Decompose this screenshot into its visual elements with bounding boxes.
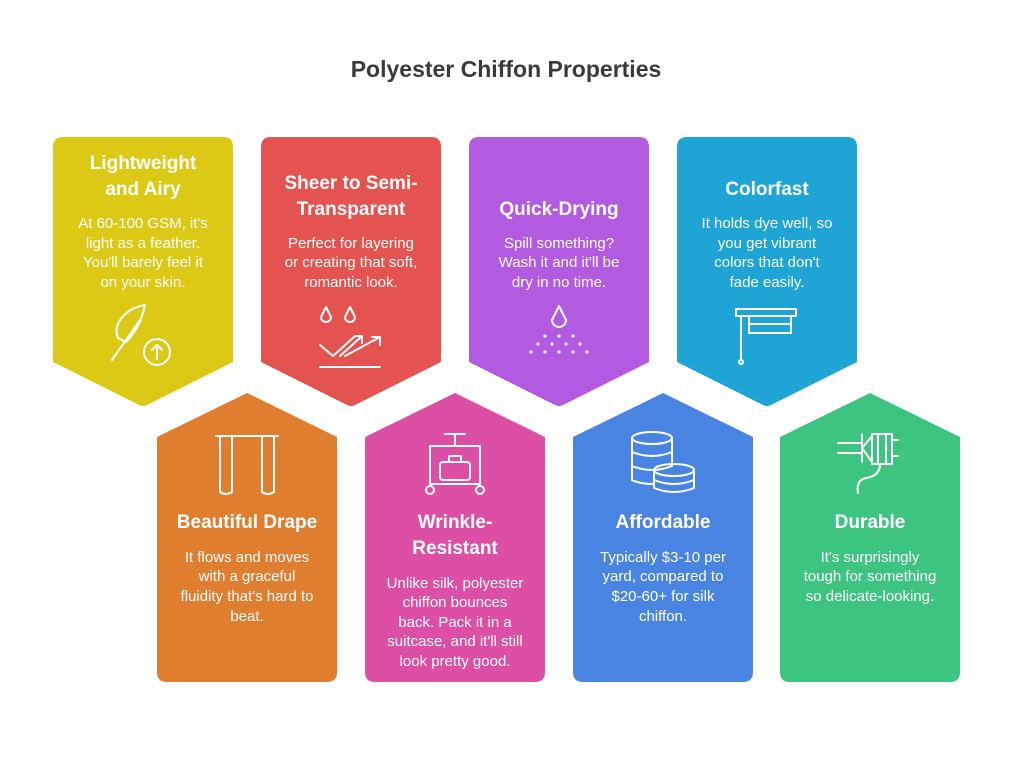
- title: Polyester Chiffon Properties: [351, 56, 661, 82]
- panel: colorfast: [677, 137, 857, 406]
- panel: colorfast: colors that don't: [714, 254, 821, 271]
- panel: wrinkle resistant: [365, 393, 545, 682]
- panel: lightweight and airy: [53, 137, 233, 406]
- panel: colorfast: It holds dye well, so: [702, 215, 832, 232]
- panel: wrinkle resistant: suitcase, and it'll still: [387, 633, 523, 650]
- panel: affordable: Affordable: [616, 512, 710, 533]
- panel: sheer: Sheer to Semi-: [284, 173, 418, 194]
- panel: durable: [780, 393, 960, 682]
- panel: colorfast: fade easily.: [730, 274, 804, 291]
- panel: wrinkle resistant: back. Pack it in a: [398, 614, 512, 631]
- panel: lightweight and airy: on your skin.: [100, 274, 186, 291]
- panel: beautiful drape: Beautiful Drape: [177, 512, 317, 533]
- panel: sheer: or creating that soft,: [285, 254, 417, 271]
- panel: lightweight and airy: light as a feather.: [86, 235, 200, 252]
- icon: feather: [112, 305, 170, 365]
- panel: lightweight and airy: Lightweight: [90, 153, 197, 174]
- panel: sheer: Transparent: [297, 199, 406, 220]
- icon: curtains: [216, 436, 278, 494]
- panel: beautiful drape: It flows and moves: [185, 549, 309, 566]
- icon: luggage cart: [426, 434, 484, 494]
- panel: wrinkle resistant: look pretty good.: [400, 653, 510, 670]
- panel: lightweight and airy: and Airy: [105, 179, 181, 200]
- panel: sheer: Perfect for layering: [288, 235, 414, 252]
- panel: wrinkle resistant: Unlike silk, polyester: [387, 575, 523, 592]
- icon: roller blind: [736, 309, 796, 364]
- panel: affordable: [573, 393, 753, 682]
- panel: lightweight and airy: At 60-100 GSM, it's: [78, 215, 208, 232]
- panel: quick drying: Quick-Drying: [499, 199, 619, 220]
- panel: beautiful drape: with a graceful: [198, 568, 295, 585]
- panel: affordable: Typically $3-10 per: [600, 549, 726, 566]
- panel: colorfast: you get vibrant: [718, 235, 817, 252]
- icon: plug cable: [838, 434, 898, 493]
- panel: affordable: yard, compared to: [603, 568, 723, 585]
- panel: lightweight and airy: You'll barely feel it: [83, 254, 204, 271]
- panel: quick drying: Spill something?: [504, 235, 614, 252]
- panel: beautiful drape: beat.: [230, 608, 264, 625]
- panel: quick drying: Wash it and it'll be: [499, 254, 619, 271]
- panel: quick drying: dry in no time.: [512, 274, 606, 291]
- panel: affordable: $20-60+ for silk: [612, 588, 715, 605]
- panel: affordable: chiffon.: [639, 608, 687, 625]
- icon: coins: [632, 432, 694, 492]
- panel: durable: Durable: [835, 512, 905, 533]
- icon: drops and arrows: [320, 307, 380, 367]
- icon: drop with dots: [529, 306, 589, 354]
- panel: wrinkle resistant: chiffon bounces: [403, 594, 507, 611]
- panel: wrinkle resistant: Resistant: [412, 538, 498, 559]
- panel: wrinkle resistant: Wrinkle-: [418, 512, 492, 533]
- panel: colorfast: Colorfast: [725, 179, 809, 200]
- panel: beautiful drape: [157, 393, 337, 682]
- panel: durable: so delicate-looking.: [806, 588, 934, 605]
- panel: durable: It's surprisingly: [821, 549, 920, 566]
- panel: sheer: romantic look.: [304, 274, 398, 291]
- panel: sheer: [261, 137, 441, 406]
- panel: quick drying: [469, 137, 649, 406]
- panel: durable: tough for something: [804, 568, 936, 585]
- panel: beautiful drape: fluidity that's hard to: [181, 588, 313, 605]
